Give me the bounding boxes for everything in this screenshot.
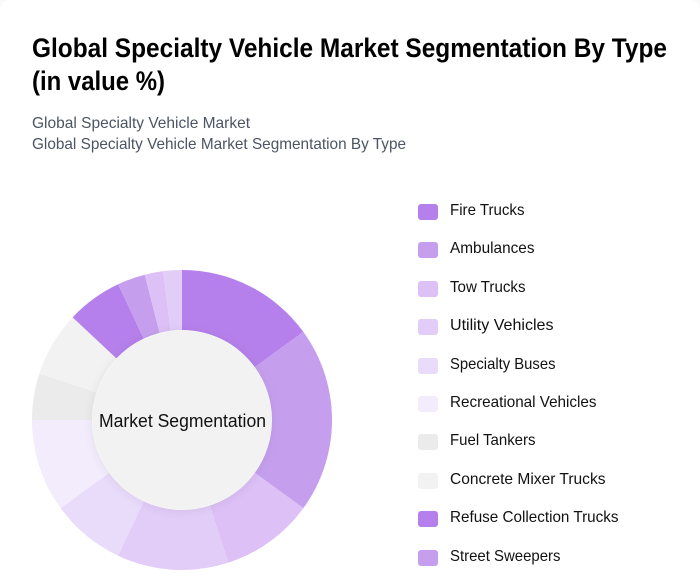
- segment: Utility Vehicles repeat 2%: [163, 270, 182, 331]
- legend item: Fuel Tankers: Fuel Tankers: [450, 432, 536, 449]
- subtitle text: Global Specialty Vehicle Market: [32, 115, 251, 132]
- segment: Tow Trucks 10%: [210, 473, 303, 563]
- segment: Concrete Mixer Trucks 7%: [39, 317, 116, 392]
- segment: Fuel Tankers 5%: [32, 374, 96, 420]
- centre label: Market Segmentation: [99, 411, 266, 431]
- subtitle text: [32, 115, 406, 153]
- segment: Specialty Buses 8%: [61, 473, 144, 556]
- legend item: Ambulances: [418, 240, 534, 258]
- legend item: Tow Trucks: [418, 279, 526, 297]
- segment: Fire Trucks 15%: [182, 270, 303, 367]
- legend item: Fuel Tankers: [418, 432, 536, 450]
- legend item: Street Sweepers: [418, 548, 560, 566]
- legend item: Specialty Buses: Specialty Buses: [450, 356, 556, 373]
- legend item: Concrete Mixer Trucks: Concrete Mixer Trucks: [450, 471, 606, 488]
- legend item: Utility Vehicles: Utility Vehicles: [450, 317, 554, 334]
- legend item: Fire Trucks: Fire Trucks: [450, 202, 524, 219]
- legend item: Refuse Collection Trucks: Refuse Collection Trucks: [450, 509, 618, 526]
- title: (in value %): [32, 66, 165, 96]
- donut centre: [92, 330, 272, 510]
- legend item: Fire Trucks: [418, 202, 524, 220]
- title: [32, 33, 667, 96]
- legend item: Specialty Buses: [418, 356, 556, 374]
- segment: Tow Trucks repeat 2%: [145, 271, 171, 333]
- segment: Ambulances 20%: [255, 332, 332, 508]
- segment: Utility Vehicles 12%: [118, 501, 228, 570]
- legend item: Recreational Vehicles: Recreational Vehicles: [450, 394, 596, 411]
- legend item: Ambulances: Ambulances: [450, 240, 534, 257]
- segment: Refuse Collection Trucks 6%: [73, 284, 144, 358]
- legend item: Tow Trucks: Tow Trucks: [450, 279, 526, 296]
- donut chart: [32, 270, 332, 570]
- segment: Street Sweepers 3%: [118, 275, 160, 339]
- segment: Recreational Vehicles 10%: [32, 420, 109, 508]
- legend: [418, 202, 618, 566]
- legend item: Street Sweepers: Street Sweepers: [450, 548, 560, 565]
- subtitle text: Global Specialty Vehicle Market Segmentation By Type: [32, 136, 406, 153]
